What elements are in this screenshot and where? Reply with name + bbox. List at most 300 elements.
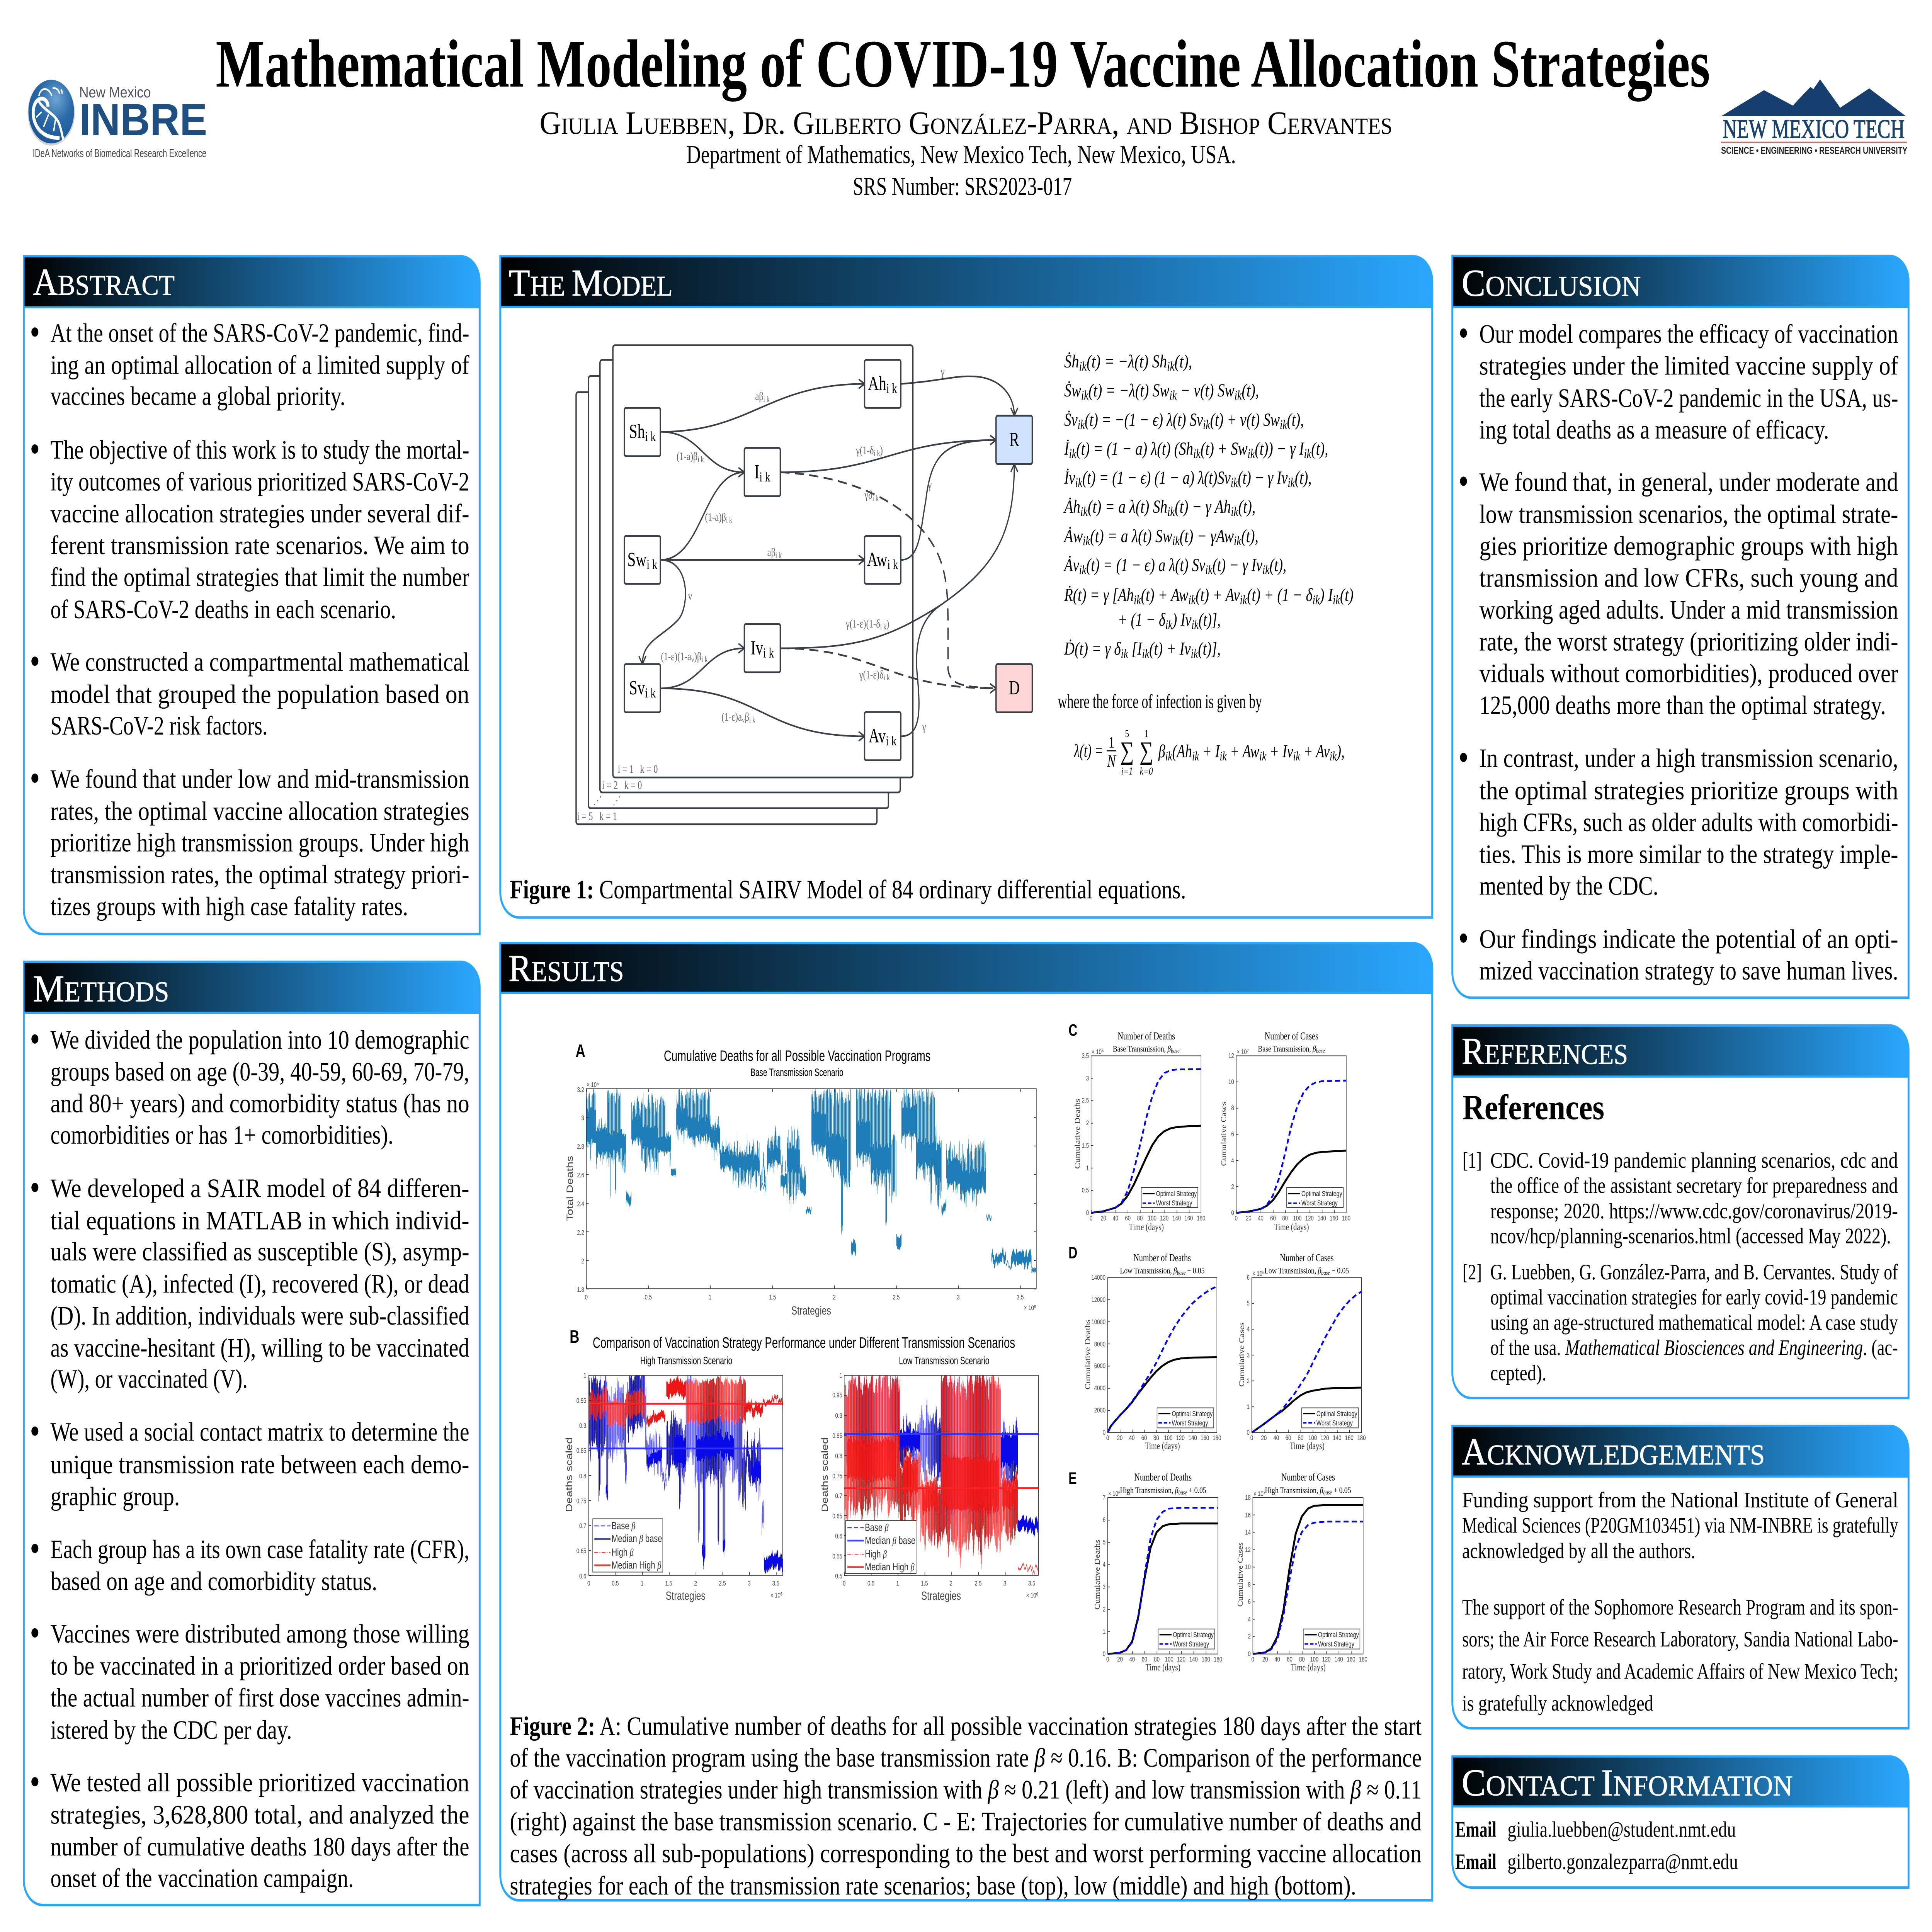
diagram: compartmental model: Ii k (754, 461, 770, 485)
chart C deaths: 0.5 (1082, 1187, 1089, 1194)
chart E deaths: 140 (1189, 1656, 1198, 1663)
conclusion bullets: ing total deaths as a measure of efficacy. (1479, 415, 1829, 445)
chart D deaths: 12000 (1091, 1296, 1105, 1304)
chart B right: low transmission: × 106 (1026, 1592, 1038, 1599)
chart C cases: Cumulative Cases (1219, 1102, 1228, 1166)
chart D deaths: 0 (1106, 1434, 1109, 1442)
chart E deaths: 20 (1117, 1656, 1123, 1663)
chart C cases (1219, 1030, 1350, 1232)
chart C cases: 140 (1318, 1215, 1326, 1222)
panel: the model (500, 256, 1432, 918)
chart E deaths: 7 (1103, 1494, 1105, 1502)
diagram: compartmental model: Svi k (629, 677, 656, 701)
chart E deaths: 160 (1202, 1656, 1210, 1663)
chart D deaths: 60 (1141, 1434, 1147, 1442)
logo: New Mexico Tech: NEW MEXICO TECH (1723, 115, 1905, 144)
chart A: cumulative deaths: 3.5 (1017, 1294, 1024, 1301)
diagram: compartmental model: aβi k (767, 546, 782, 560)
diagram: compartmental model: i = 5 k = 1 (577, 810, 617, 823)
abstract bullets: transmission rates, the optimal strategy priori- (51, 860, 469, 889)
abstract bullets: tizes groups with high case fatality rates. (51, 892, 408, 921)
chart D deaths: 20 (1117, 1434, 1123, 1442)
chart E cases: × 107 (1253, 1490, 1265, 1498)
logo: New Mexico INBRE: IDeA Networks of Biomedical Research Excellence (33, 146, 206, 160)
chart D cases: 100 (1308, 1434, 1317, 1442)
methods bullets: number of cumulative deaths 180 days after the (51, 1832, 469, 1862)
chart C deaths: 1 (1086, 1165, 1089, 1172)
chart B: scenario comparison (564, 1327, 1039, 1602)
chart C deaths: 0 (1090, 1215, 1093, 1222)
chart C deaths: 40 (1112, 1215, 1118, 1222)
chart B left: high transmission: 1.5 (665, 1580, 672, 1587)
conclusion heading: CONCLUSION (1462, 262, 1641, 304)
methods header bar (24, 962, 480, 1013)
chart E deaths: 5 (1103, 1539, 1105, 1546)
chart B left: high transmission: 0.75 (577, 1498, 586, 1505)
methods bullets: We tested all possible prioritized vaccination (51, 1768, 469, 1798)
legend (1157, 1408, 1214, 1428)
chart A: cumulative deaths: 2 (833, 1294, 836, 1301)
chart A: cumulative deaths: Strategies (791, 1304, 831, 1317)
chart D cases: 0 (1250, 1434, 1253, 1442)
chart B left: high transmission: 1 (583, 1372, 586, 1379)
equations: Ṡwik(t) = −λ(t) Swik − v(t) Swik(t), (1064, 380, 1259, 402)
chart C cases: 10 (1228, 1078, 1234, 1086)
reference list: G. Luebben, G. González-Parra, and B. Cervantes. Study of (1490, 1260, 1898, 1284)
legend: Worst Strategy (1173, 1640, 1209, 1648)
chart C deaths: 0 (1086, 1209, 1089, 1217)
legend B left: Median β base (612, 1533, 662, 1545)
conclusion header bar (1452, 256, 1908, 307)
chart C cases: 60 (1270, 1215, 1276, 1222)
chart A: cumulative deaths: 0.5 (645, 1294, 652, 1301)
chart E deaths: 2 (1103, 1606, 1105, 1613)
chart B left: high transmission: 0 (587, 1580, 590, 1587)
chart E cases: 16 (1245, 1512, 1251, 1519)
reference list: response; 2020. https://www.cdc.gov/coronavirus/2019- (1490, 1199, 1898, 1223)
chart C cases: 4 (1231, 1157, 1234, 1165)
references header bar (1452, 1026, 1908, 1077)
force of infection equation (1073, 728, 1345, 777)
chart D deaths: 10000 (1091, 1318, 1105, 1326)
chart E cases: 4 (1248, 1616, 1251, 1623)
legend B right: Median High β (865, 1561, 915, 1573)
abstract bullets: We constructed a compartmental mathematical (51, 648, 469, 677)
chart B left: high transmission: 2 (694, 1580, 697, 1587)
chart E deaths: 60 (1141, 1656, 1147, 1663)
chart E cases: 18 (1245, 1494, 1251, 1502)
model header bar (500, 256, 1432, 307)
chart B right: low transmission: 1 (840, 1372, 842, 1379)
chart D deaths: 4000 (1094, 1384, 1105, 1392)
chart C cases: 100 (1293, 1215, 1302, 1222)
chart B left: high transmission: 0.85 (577, 1447, 586, 1455)
chart C deaths: 3 (1086, 1075, 1089, 1082)
chart C deaths: Time (days) (1129, 1221, 1164, 1232)
chart C cases: 2 (1231, 1183, 1234, 1190)
chart C deaths (1073, 1030, 1206, 1232)
chart E cases: 40 (1274, 1656, 1280, 1663)
chart B right: low transmission: 2.5 (975, 1580, 981, 1587)
chart E cases (1236, 1471, 1367, 1673)
chart D cases: 1 (1247, 1403, 1250, 1411)
chart B right: low transmission: 0.9 (835, 1412, 842, 1420)
logo: New Mexico INBRE: New Mexico (79, 84, 151, 101)
chart C deaths: 2 (1086, 1119, 1089, 1127)
methods bullets: as vaccine-hesitant (H), willing to be vaccinated (51, 1333, 469, 1363)
methods bullets: groups based on age (0-39, 40-59, 60-69, 70-79, (51, 1057, 469, 1087)
contact header bar (1452, 1757, 1908, 1806)
panel: conclusion (1452, 256, 1908, 998)
chart C cases: 0 (1231, 1209, 1234, 1217)
chart D deaths: 6000 (1094, 1362, 1105, 1370)
chart A: cumulative deaths: × 105 (587, 1081, 599, 1088)
chart B right: low transmission: 2 (949, 1580, 952, 1587)
equations: Ḋ(t) = γ δik [Iik(t) + Ivik(t)], (1064, 639, 1221, 661)
equations: Ṡhik(t) = −λ(t) Sh ik(t), (1064, 351, 1192, 373)
chart D cases: 160 (1345, 1434, 1354, 1442)
legend: Worst Strategy (1156, 1199, 1192, 1207)
equations: Ṡvik(t) = −(1 − ϵ) λ(t) Svik(t) + v(t) Swik(t), (1064, 410, 1304, 432)
chart E cases: 2 (1248, 1633, 1251, 1640)
diagram: compartmental model: aβi k (755, 390, 770, 403)
chart E cases: 60 (1287, 1656, 1293, 1663)
chart C cases: 120 (1305, 1215, 1314, 1222)
methods bullets: strategies, 3,628,800 total, and analyzed the (51, 1800, 469, 1830)
chart C deaths: 100 (1148, 1215, 1156, 1222)
chart E deaths: 3 (1103, 1583, 1105, 1591)
abstract bullets: find the optimal strategies that limit the number (51, 563, 469, 592)
logo: New Mexico Tech (1721, 80, 1907, 156)
conclusion bullets (1460, 320, 1898, 986)
chart C cases: 6 (1231, 1131, 1234, 1138)
chart C deaths: 3.5 (1082, 1052, 1089, 1060)
conclusion bullets: the early SARS-CoV-2 pandemic in the USA, us- (1479, 384, 1898, 413)
chart B right: low transmission: 0.8 (835, 1452, 842, 1460)
conclusion bullets: rate, the worst strategy (prioritizing older indi- (1479, 627, 1898, 656)
diagram: compartmental model: Ivi k (751, 636, 774, 660)
chart C cases: 12 (1228, 1052, 1234, 1060)
title: Mathematical Modeling of COVID-19 Vaccine Allocation Strategies (216, 26, 1710, 102)
equations: + (1 − δik) Ivik(t)], (1118, 610, 1221, 632)
methods bullets: We used a social contact matrix to determine the (51, 1418, 469, 1447)
abstract bullets: The objective of this work is to study the mortal- (51, 435, 469, 465)
legend B left: Base β (612, 1520, 635, 1532)
chart E deaths: High Transmission, βbase + 0.05 (1120, 1486, 1206, 1496)
reference list: ncov/hcp/planning-scenarios.html (accessed May 2022). (1490, 1224, 1891, 1248)
panel: contact information (1452, 1757, 1908, 1888)
chart C deaths: 2.5 (1082, 1097, 1089, 1104)
chart E deaths: 100 (1165, 1656, 1173, 1663)
chart D cases: Low Transmission, βbase − 0.05 (1264, 1266, 1349, 1276)
charts D: low transmission: D (1068, 1243, 1077, 1262)
methods bullets: graphic group. (51, 1482, 180, 1511)
legend B right: Median β base (865, 1535, 915, 1546)
chart E deaths: 6 (1103, 1516, 1105, 1524)
chart E cases: 140 (1335, 1656, 1343, 1663)
conclusion bullets: the optimal strategies prioritize groups with (1479, 776, 1898, 805)
chart D deaths: Low Transmission, βbase − 0.05 (1120, 1266, 1205, 1276)
conclusion bullets: gies prioritize demographic groups with high (1479, 532, 1898, 561)
conclusion bullets: low transmission scenarios, the optimal strate- (1479, 500, 1898, 529)
chart A: cumulative deaths: 1.5 (769, 1294, 776, 1301)
legend: Worst Strategy (1172, 1419, 1208, 1427)
results header bar (500, 943, 1432, 993)
diagram: compartmental model: γ (927, 478, 932, 491)
diagram: compartmental model: R (1009, 428, 1019, 451)
chart D deaths: 80 (1153, 1434, 1159, 1442)
contact heading: CONTACT INFORMATION (1462, 1762, 1793, 1804)
acknowledgements text: Funding support from the National Institute of General (1462, 1488, 1898, 1512)
equations: Ȧwik(t) = a λ(t) Swik(t) − γAwik(t), (1063, 526, 1259, 548)
contact emails: gilberto.gonzalezparra@nmt.edu (1507, 1849, 1738, 1874)
chart E deaths: 4 (1103, 1561, 1105, 1568)
chart B left: high transmission: Deaths scaled (564, 1437, 574, 1512)
charts D: low transmission (1068, 1243, 1366, 1451)
conclusion bullets: 125,000 deaths more than the optimal strategy. (1479, 691, 1886, 720)
chart C deaths: 140 (1172, 1215, 1181, 1222)
chart C cases: 8 (1231, 1104, 1234, 1112)
acknowledgements text (1462, 1488, 1898, 1715)
logo: New Mexico INBRE: INBRE (79, 95, 207, 145)
chart A: cumulative deaths: 2.2 (577, 1229, 584, 1236)
force of infection equation: βik(Ahik + Iik + Awik + Ivik + Avik), (1158, 741, 1345, 764)
methods bullets: tomatic (A), infected (I), recovered (R), or dead (51, 1269, 469, 1299)
charts E: high transmission: E (1068, 1469, 1077, 1487)
logo: New Mexico Tech: SCIENCE • ENGINEERING • RESEARCH UNIVERSITY (1721, 145, 1907, 156)
chart C deaths: × 105 (1092, 1048, 1104, 1056)
chart C deaths: 180 (1197, 1215, 1206, 1222)
chart B right: low transmission: 3.5 (1028, 1580, 1035, 1587)
chart B right: low transmission: 0.55 (832, 1553, 842, 1560)
methods bullets: tial equations in MATLAB in which individ- (51, 1206, 469, 1235)
methods heading: METHODS (33, 968, 169, 1010)
diagram: compartmental model: ⋰ ⋰ (593, 794, 621, 807)
chart C deaths: 80 (1137, 1215, 1143, 1222)
chart C deaths: 120 (1160, 1215, 1168, 1222)
chart A: cumulative deaths: Total Deaths (565, 1156, 575, 1221)
chart B left: high transmission: Strategies (666, 1589, 706, 1602)
chart D cases: 20 (1261, 1434, 1267, 1442)
chart B right: low transmission: 3 (1003, 1580, 1006, 1587)
chart E cases: 180 (1359, 1656, 1367, 1663)
chart A: cumulative deaths (565, 1041, 1036, 1317)
chart C cases: Number of Cases (1265, 1030, 1318, 1042)
chart D cases: 3 (1247, 1352, 1250, 1359)
abstract header bar (24, 256, 480, 307)
panel: acknowledgements (1452, 1426, 1908, 1728)
contact emails: Email (1455, 1817, 1497, 1842)
logo: New Mexico INBRE (28, 80, 207, 160)
methods bullets: to be vaccinated in a prioritized order based on (51, 1651, 469, 1681)
panel: abstract (24, 256, 480, 934)
figure 1 caption: Figure 1: Compartmental SAIRV Model of 84 ordinary differential equations. (510, 875, 1186, 905)
abstract bullets: ity outcomes of various prioritized SARS-CoV-2 (51, 467, 469, 497)
chart D cases: 180 (1357, 1434, 1366, 1442)
contact emails: giulia.luebben@student.nmt.edu (1507, 1817, 1736, 1842)
legend: Optimal Strategy (1316, 1410, 1357, 1418)
acknowledgements text: ratory, Work Study and Academic Affairs of New Mexico Tech; (1462, 1659, 1898, 1684)
chart D cases: Time (days) (1289, 1440, 1325, 1451)
diagram: compartmental model: D (1009, 677, 1020, 699)
chart D cases: 120 (1320, 1434, 1329, 1442)
legend: Optimal Strategy (1156, 1190, 1197, 1198)
abstract bullets: prioritize high transmission groups. Under high (51, 828, 469, 858)
chart C cases: 40 (1258, 1215, 1264, 1222)
methods bullets: Each group has a its own case fatality rate (CFR), (51, 1535, 469, 1564)
equations: Ȧvik(t) = (1 − ϵ) a λ(t) Svik(t) − γ Ivik(t), (1063, 555, 1286, 577)
chart A: cumulative deaths: 0 (585, 1294, 588, 1301)
chart C cases: 160 (1330, 1215, 1338, 1222)
chart E cases: Cumulative Cases (1236, 1543, 1244, 1607)
chart E cases: 14 (1245, 1529, 1251, 1536)
diagram: compartmental model: (1-ε)avβi k (721, 711, 756, 724)
methods bullets: Vaccines were distributed among those willing (51, 1619, 469, 1649)
references subheading: References (1463, 1087, 1604, 1127)
figure 2 caption: strategies for each of the transmission rate scenarios; base (top), low (middle) and high (bottom). (510, 1871, 1356, 1901)
references heading: REFERENCES (1462, 1031, 1628, 1072)
chart A: cumulative deaths: 1.8 (577, 1286, 584, 1294)
legend B left: High β (612, 1547, 634, 1558)
chart D deaths: 14000 (1091, 1274, 1105, 1282)
chart E cases: Time (days) (1291, 1662, 1326, 1673)
diagram: compartmental model: v (688, 590, 692, 602)
chart B right: low transmission: 0.95 (832, 1392, 842, 1399)
chart D deaths: 0 (1103, 1429, 1105, 1436)
legend B right: High β (865, 1549, 887, 1560)
legend B right (845, 1520, 916, 1573)
diagram: compartmental model: γ (940, 365, 944, 378)
chart E deaths: × 105 (1108, 1490, 1120, 1498)
figure 2 caption: (right) against the base transmission scenario. C - E: Trajectories for cumulative number of deaths and (510, 1807, 1422, 1837)
legend (1287, 1187, 1343, 1208)
contact emails (1455, 1817, 1738, 1874)
conclusion bullets: Our findings indicate the potential of an opti- (1479, 925, 1898, 954)
reference list: [1] (1463, 1148, 1482, 1173)
figure 2 caption: of vaccination strategies under high transmission with β ≈ 0.21 (left) and low transmission with β ≈ 0.11 (510, 1776, 1422, 1804)
equations: İvik(t) = (1 − ϵ) (1 − a) λ(t)Svik(t) − γ Ivik(t), (1064, 468, 1311, 490)
force of infection equation: 1 (1109, 733, 1114, 751)
diagram: compartmental model: i = 2 k = 0 (602, 779, 642, 791)
chart D deaths: 160 (1201, 1434, 1209, 1442)
chart D cases: 80 (1298, 1434, 1304, 1442)
chart C cases: Base Transmission, βbase (1258, 1044, 1325, 1054)
chart C cases: × 107 (1237, 1048, 1249, 1056)
legend: Worst Strategy (1316, 1419, 1353, 1427)
chart D deaths: 40 (1129, 1434, 1135, 1442)
chart C deaths: 160 (1184, 1215, 1193, 1222)
chart B: scenario comparison: Comparison of Vaccination Strategy Performance under Different Transmission Scenarios (593, 1335, 1015, 1351)
conclusion bullets: transmission and low CFRs, such young and (1479, 564, 1898, 593)
abstract bullets: ing an optimal allocation of a limited supply of (51, 351, 469, 380)
chart A: cumulative deaths: 2.8 (577, 1143, 584, 1151)
reference list: optimal vaccination strategies for early covid-19 pandemic (1490, 1285, 1898, 1309)
chart A: cumulative deaths: 2.5 (893, 1294, 900, 1301)
abstract bullets: of SARS-CoV-2 deaths in each scenario. (51, 595, 396, 624)
acknowledgements text: is gratefully acknowledged (1462, 1691, 1653, 1715)
conclusion bullets: In contrast, under a high transmission scenario, (1479, 744, 1898, 773)
diagram: compartmental model: γ (922, 720, 926, 733)
conclusion bullets: Our model compares the efficacy of vaccination (1479, 320, 1898, 349)
chart D deaths: Number of Deaths (1133, 1252, 1191, 1264)
chart A: cumulative deaths: Base Transmission Scenario (750, 1067, 844, 1078)
charts E: high transmission (1068, 1469, 1367, 1673)
abstract bullets: vaccine allocation strategies under several dif- (51, 499, 469, 529)
chart B left: high transmission: 1 (641, 1580, 643, 1587)
legend: Worst Strategy (1318, 1640, 1355, 1648)
chart E cases: 100 (1310, 1656, 1319, 1663)
chart D cases: Cumulative Cases (1237, 1322, 1246, 1387)
chart A: cumulative deaths: 2.6 (577, 1172, 584, 1179)
legend B left (593, 1519, 663, 1572)
abstract bullets (31, 318, 469, 921)
abstract heading: ABSTRACT (33, 261, 175, 303)
chart E deaths: 0 (1106, 1656, 1109, 1663)
conclusion bullets: We found that, in general, under moderate and (1479, 468, 1898, 497)
chart E deaths: Cumulative Deaths (1093, 1539, 1101, 1610)
chart B right: low transmission: Strategies (921, 1589, 961, 1602)
chart B left: high transmission (564, 1355, 783, 1602)
equations: İik(t) = (1 − a) λ(t) (Shik(t) + Swik(t)) − γ Iik(t), (1064, 439, 1328, 461)
diagram: compartmental model (576, 345, 1032, 824)
diagram: compartmental model: γ(1-δi k) (855, 444, 883, 457)
chart A: cumulative deaths: Cumulative Deaths for all Possible Vaccination Programs (664, 1048, 930, 1064)
chart B right: low transmission (820, 1355, 1039, 1602)
chart B right: low transmission: 0.75 (832, 1473, 842, 1480)
methods bullets: (W), or vaccinated (V). (51, 1365, 248, 1394)
chart D cases: 5 (1247, 1300, 1250, 1307)
chart D deaths: 120 (1176, 1434, 1185, 1442)
chart D cases: 6 (1247, 1274, 1250, 1282)
chart D deaths: 8000 (1094, 1341, 1105, 1348)
chart E cases: 0 (1248, 1650, 1251, 1658)
chart A: cumulative deaths: × 106 (1024, 1304, 1036, 1312)
methods bullets: comorbidities or has 1+ comorbidities). (51, 1121, 393, 1150)
chart D cases: 2 (1247, 1378, 1250, 1385)
chart C cases: 0 (1235, 1215, 1238, 1222)
methods bullets: the actual number of first dose vaccines admin- (51, 1684, 469, 1713)
reference list: of the usa. Mathematical Biosciences and Engineering . (ac- (1490, 1335, 1898, 1360)
chart E deaths: 180 (1214, 1656, 1222, 1663)
chart E deaths: 80 (1154, 1656, 1160, 1663)
chart E cases: 12 (1245, 1546, 1251, 1554)
acknowledgements text: The support of the Sophomore Research Program and its spon- (1462, 1595, 1898, 1619)
legend: Optimal Strategy (1318, 1631, 1359, 1639)
chart B: scenario comparison: B (570, 1327, 579, 1347)
chart B right: low transmission: 0.65 (832, 1513, 842, 1520)
diagram: compartmental model: Awi k (867, 548, 898, 572)
chart B right: low transmission: Low Transmission Scenario (899, 1355, 989, 1367)
legend: Optimal Strategy (1173, 1631, 1214, 1639)
methods bullets: uals were classified as susceptible (S), asymp- (51, 1237, 469, 1267)
chart C deaths: Number of Deaths (1117, 1030, 1175, 1042)
chart B right: low transmission: 0.5 (867, 1580, 874, 1587)
diagram: compartmental model: Avi k (869, 724, 897, 748)
chart E deaths (1093, 1471, 1222, 1673)
chart B right: low transmission: 0.85 (832, 1432, 842, 1440)
results heading: RESULTS (509, 947, 624, 989)
chart E deaths: Number of Deaths (1134, 1471, 1192, 1483)
chart A: cumulative deaths: 3 (581, 1114, 584, 1122)
contact emails: Email (1455, 1849, 1497, 1874)
panel: results (500, 943, 1432, 1901)
chart A: cumulative deaths: 2 (581, 1258, 584, 1265)
force of infection equation: 5 (1125, 728, 1129, 740)
force of infection equation: N (1107, 752, 1117, 770)
chart E cases: 6 (1248, 1598, 1251, 1605)
model heading: THE MODEL (509, 262, 673, 304)
diagram: compartmental model: γ(1-ε)(1-δi k) (845, 617, 889, 631)
